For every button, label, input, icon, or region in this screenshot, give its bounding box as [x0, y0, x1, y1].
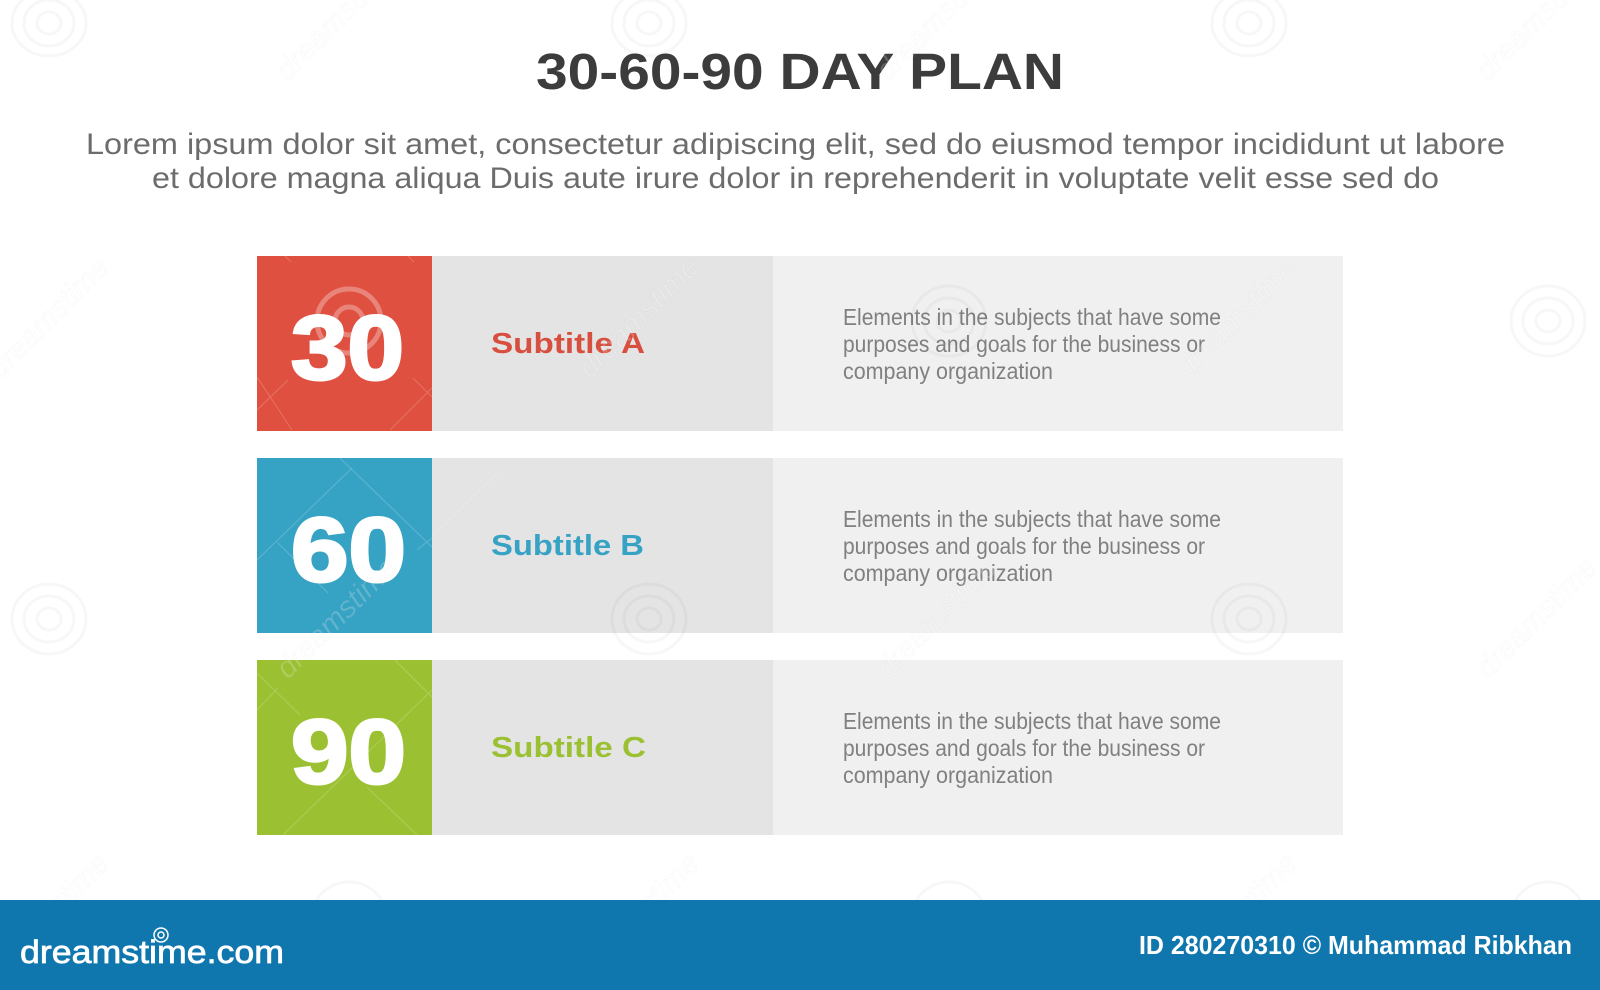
row 30 description: purposes and goals for the business or [843, 331, 1205, 357]
row 90 subtitle background [432, 660, 773, 835]
watermark: diagonal text: dreamstime [1170, 251, 1304, 385]
row 30 description: company organization [843, 358, 1053, 384]
row 60 number tile [257, 458, 432, 633]
row 90 number: 90 [291, 702, 406, 803]
row 90 description background [772, 660, 1343, 835]
row 90 description: purposes and goals for the business or [843, 735, 1205, 761]
footer credit: ID 280270310 © Muhammad Ribkhan [1139, 930, 1572, 960]
row 90 subtitle: Subtitle C [491, 732, 646, 764]
watermark: diagonal text: dreamstime [1170, 847, 1304, 981]
intro paragraph: Lorem ipsum dolor sit amet, consectetur adipiscing elit, sed do eiusmod tempor incididunt ut labore [86, 128, 1505, 161]
row 30 number tile [257, 256, 432, 431]
row 60 description: Elements in the subjects that have some [843, 506, 1221, 532]
row 60 description: company organization [843, 560, 1053, 586]
footer logo: dreamstime.com: dreamstime.com [20, 934, 284, 970]
title: 30-60-90 DAY PLAN [536, 43, 1064, 100]
row 90 description: company organization [843, 762, 1053, 788]
icon: spiral [154, 928, 168, 942]
row 30 description: Elements in the subjects that have some [843, 304, 1221, 330]
row 30 subtitle: Subtitle A [491, 328, 645, 360]
panel: row 60 [257, 458, 1343, 633]
row 60 subtitle: Subtitle B [491, 530, 644, 562]
row 60 number: 60 [291, 500, 406, 601]
panel: row 30 [257, 256, 1343, 431]
row 60 description background [772, 458, 1343, 633]
row 60 description [843, 506, 1221, 586]
watermark: diagonal text: dreamstime [572, 847, 706, 981]
row 30 description background [772, 256, 1343, 431]
row 30 number: 30 [291, 298, 404, 399]
row 90 description [843, 708, 1221, 788]
row 90 number tile [257, 660, 432, 835]
watermark: diagonal text: dreamstime [270, 551, 404, 685]
footer bar [0, 900, 1600, 990]
panel: row 90 [257, 660, 1343, 835]
row 30 description [843, 304, 1221, 384]
watermark: hatch lines on tiles [257, 256, 500, 835]
intro paragraph [86, 128, 1505, 195]
row 90 description: Elements in the subjects that have some [843, 708, 1221, 734]
row 60 subtitle background [432, 458, 773, 633]
intro paragraph: et dolore magna aliqua Duis aute irure dolor in reprehenderit in voluptate velit esse sed do [152, 162, 1439, 195]
watermark: diagonal text: dreamstime [870, 551, 1004, 685]
watermark: diagonal text: dreamstime [572, 251, 706, 385]
row 60 description: purposes and goals for the business or [843, 533, 1205, 559]
row 30 subtitle background [432, 256, 773, 431]
watermark: diagonal text: dreamstime [1470, 551, 1600, 685]
